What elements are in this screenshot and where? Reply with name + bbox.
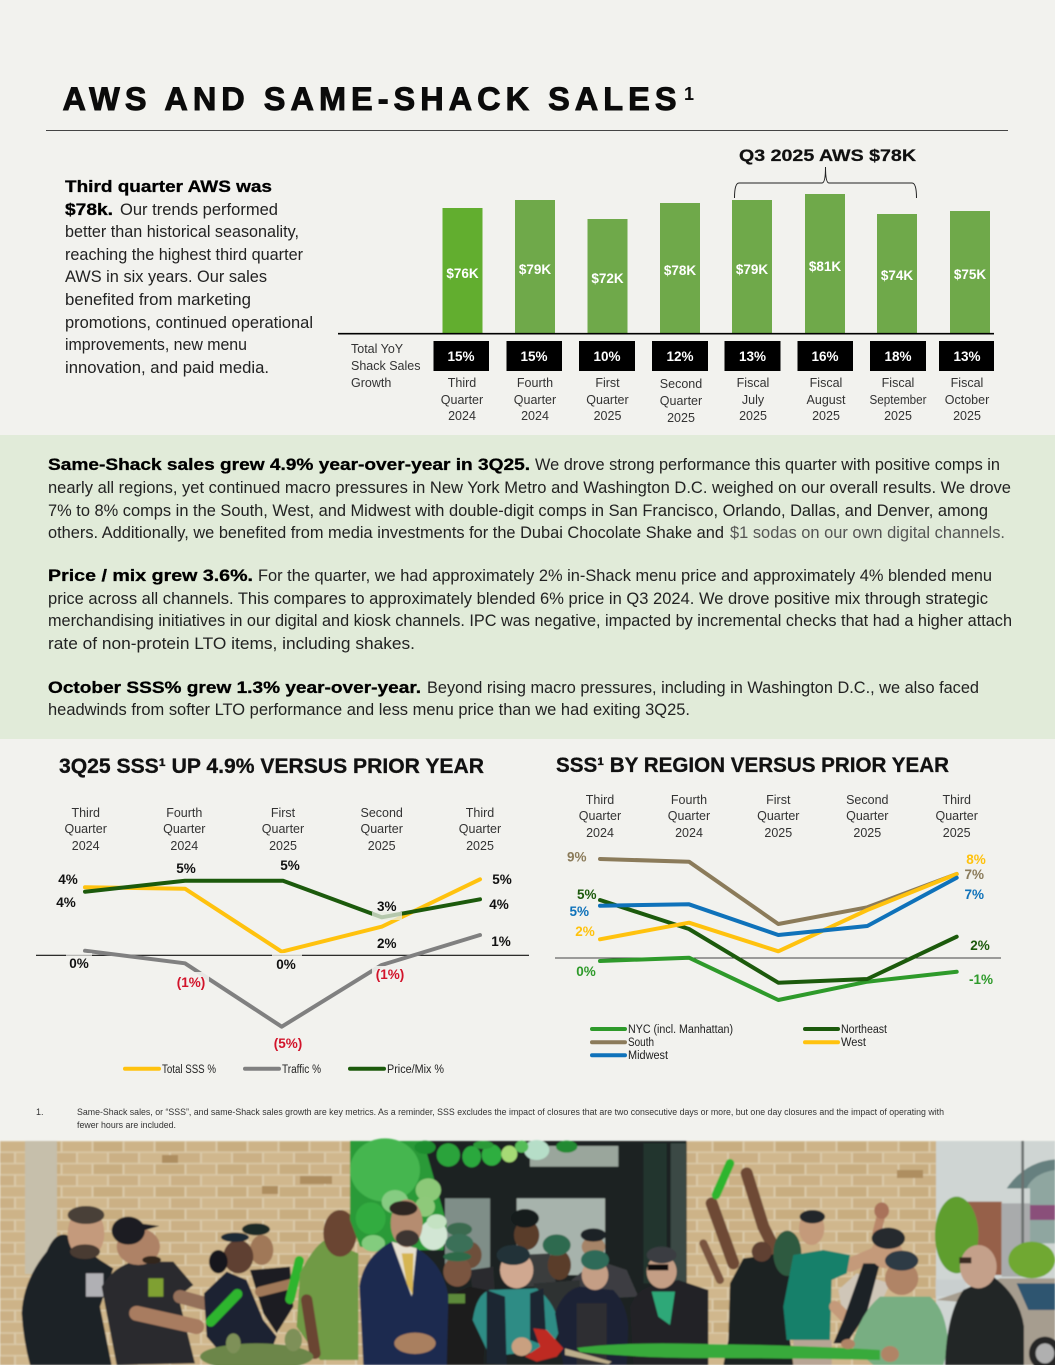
paragraph: price and mix: For the quarter, we had approximately 2% in-Shack menu price and approximately 4% blended menu [258, 567, 992, 585]
period labels: First [595, 376, 620, 390]
period labels: Fiscal [737, 376, 769, 390]
line chart: SSS by region: Quarter [757, 809, 799, 823]
period labels: Fourth [517, 376, 553, 390]
period labels: September [870, 393, 926, 407]
person: man in black tee with cap [102, 1217, 217, 1365]
brick wall and sky [0, 1141, 1055, 1365]
person: woman in navy [204, 1233, 277, 1360]
line chart: SSS by region [555, 793, 1001, 1062]
paragraph: same-shack sales: We drove strong performance this quarter with positive comps in [535, 456, 1000, 474]
period labels: 2025 [594, 409, 621, 423]
line chart: 3Q25 SSS: 2% [377, 936, 396, 951]
legend: regions: NYC (incl. Manhattan) [628, 1024, 733, 1036]
ribbon hands [841, 1339, 899, 1362]
line chart: 3Q25 SSS: Quarter [163, 822, 205, 836]
growth percentage boxes: 10% [593, 349, 621, 364]
line chart: SSS by region: 7% [965, 887, 984, 902]
line chart: SSS by region: 0% [576, 964, 596, 979]
line chart: 3Q25 SSS: Quarter [459, 822, 501, 836]
bracket: Q3 months [734, 167, 916, 198]
line chart: SSS by region: 9% [567, 850, 586, 864]
line chart: 3Q25 SSS: 4% [489, 897, 509, 912]
person: man in black hoodie [22, 1206, 113, 1365]
line chart: SSS by region: 2025 [943, 826, 971, 840]
line chart: SSS by region: Quarter [936, 809, 978, 823]
text block: AWS summary: better than historical seasonality, [65, 223, 299, 241]
scissors [512, 1328, 612, 1364]
paragraph: October SSS: October SSS% grew 1.3% year-over-year. [48, 678, 421, 697]
line chart: 3Q25 SSS: (5%) [274, 1036, 302, 1051]
line chart: 3Q25 SSS: Third [71, 806, 100, 820]
person: man in olive shirt [297, 1210, 358, 1360]
title: AWS AND SAME-SHACK SALES [62, 81, 676, 117]
left group of people [22, 1206, 358, 1365]
period labels: 2025 [884, 409, 912, 423]
line chart: 3Q25 SSS: Third [466, 806, 494, 820]
line chart: 3Q25 SSS: (1%) [177, 975, 205, 990]
period labels: Fiscal [882, 376, 914, 390]
line chart: 3Q25 SSS: 5% [280, 858, 300, 873]
growth percentage boxes: 16% [811, 349, 839, 364]
paragraph: same-shack sales: $1 sodas on our own digital channels. [730, 524, 1005, 542]
legend: SSS chart: Total SSS % [162, 1064, 216, 1076]
growth percentage boxes: 18% [884, 349, 912, 364]
text block: AWS summary: innovation, and paid media. [65, 359, 269, 377]
panel: same-shack commentary [0, 435, 1055, 739]
heading: region chart: SSS¹ BY REGION VERSUS PRIOR YEAR [556, 754, 949, 777]
line chart: SSS by region: 7% [965, 867, 984, 882]
line chart: SSS by region: Quarter [579, 809, 621, 823]
line chart: 3Q25 SSS: 4% [58, 872, 78, 887]
paragraph: price and mix: merchandising initiatives in our digital and kiosk channels. IPC was negative, impacted by incremental checks that had a higher attach [48, 612, 1012, 630]
line chart: 3Q25 SSS: Second [360, 806, 403, 820]
photo: ribbon cutting team [0, 1138, 1055, 1365]
period labels: Second [660, 377, 702, 391]
paragraph: October SSS [48, 678, 979, 719]
paragraph: October SSS: Beyond rising macro pressures, including in Washington D.C., we also faced [427, 679, 979, 697]
growth row label: Shack Sales [351, 359, 420, 373]
line chart: 3Q25 SSS: 5% [176, 861, 196, 876]
line chart: 3Q25 SSS: 2025 [466, 839, 494, 853]
period labels: Fiscal [951, 376, 983, 390]
line chart: 3Q25 SSS: Quarter [361, 822, 403, 836]
growth row label: Growth [351, 376, 391, 390]
bar chart: AWS: $74K [881, 268, 913, 283]
paragraph: price and mix: Price / mix grew 3.6%. [48, 566, 253, 585]
legend: SSS chart: Traffic % [282, 1064, 321, 1076]
text block: AWS summary: reaching the highest third quarter [65, 246, 303, 264]
line chart: SSS by region: 5% [570, 904, 589, 919]
paragraph: same-shack sales: others. Additionally, we benefited from media investments for the Dubai Chocolate Shake and [48, 524, 724, 542]
bar chart: AWS [338, 194, 994, 334]
line chart: SSS by region: 5% [577, 887, 596, 902]
growth percentage boxes [434, 341, 994, 371]
period labels: 2025 [953, 409, 981, 423]
legend: SSS chart [125, 1064, 444, 1076]
line chart: SSS by region: Second [846, 793, 889, 807]
footnote: fewer hours are included. [77, 1120, 176, 1130]
line chart: 3Q25 SSS: 2024 [72, 839, 100, 853]
bar chart: AWS: $81K [809, 259, 841, 274]
person: bald man in leather jacket [945, 1245, 1024, 1365]
line chart: SSS by region: Quarter [846, 809, 888, 823]
line chart: 3Q25 SSS: 1% [491, 934, 511, 949]
person: woman in quilted vest [630, 1247, 708, 1365]
footnote: Same-Shack sales, or “SSS”, and same-Shack sales growth are key metrics. As a reminder, SSS excludes the impact of closures that are two consecutive days or more, but one day closures and the impact of operating with [77, 1107, 944, 1117]
period labels: 2025 [812, 409, 840, 423]
period labels: 2024 [521, 409, 549, 423]
line chart: 3Q25 SSS: 4% [56, 895, 76, 910]
paragraph: price and mix: price across all channels. This compares to approximately blended 6% price in Q3 2024. We drove positive mix through strategic [48, 590, 988, 608]
person: man in teal polo [783, 1202, 889, 1365]
line chart: SSS by region: 2025 [853, 826, 881, 840]
text block: AWS summary: benefited from marketing [65, 291, 251, 309]
line chart: SSS by region: Third [586, 793, 614, 807]
person: woman in teal shirt [473, 1245, 560, 1365]
line chart: 3Q25 SSS: Quarter [262, 822, 304, 836]
line chart: SSS by region: 2025 [764, 826, 792, 840]
period labels [441, 376, 989, 425]
paragraph: price and mix [48, 566, 1012, 653]
bar chart: AWS: $79K [519, 262, 551, 277]
legend: regions: South [628, 1037, 654, 1049]
line chart: SSS by region: 2% [970, 938, 990, 953]
text block: AWS summary: $78k. [65, 200, 113, 219]
text block: AWS summary: AWS in six years. Our sales [65, 268, 267, 286]
line chart: SSS by region: 2024 [586, 826, 614, 840]
period labels: Quarter [441, 393, 483, 407]
bar chart: AWS: $76K [446, 266, 479, 281]
footnote [36, 1107, 944, 1130]
bar chart: AWS: $78K [664, 263, 696, 278]
text block: AWS summary: improvements, new menu [65, 336, 247, 354]
back row people [445, 1209, 638, 1313]
title: 1 [684, 84, 694, 104]
person: woman in light green shirt [852, 1251, 948, 1365]
line chart: 3Q25 SSS: First [271, 806, 296, 820]
bar chart: AWS: $79K [736, 262, 768, 277]
line chart: 3Q25 SSS: (1%) [376, 967, 404, 982]
text block: AWS summary: Our trends performed [120, 201, 278, 219]
growth percentage boxes: 15% [447, 349, 475, 364]
shrub [200, 1329, 313, 1365]
green ribbon [577, 1344, 880, 1360]
period labels: Third [448, 376, 476, 390]
street background [935, 1141, 1055, 1365]
line chart: 3Q25 SSS: 2024 [170, 839, 198, 853]
person: woman in navy jacket [555, 1250, 628, 1365]
right group and street scene [703, 1141, 1055, 1365]
person: man behind, dark tee [242, 1223, 293, 1333]
person: woman raising tubes [703, 1163, 801, 1365]
paragraph: same-shack sales [48, 455, 1011, 542]
period labels: 2025 [739, 409, 767, 423]
period labels: Quarter [514, 393, 556, 407]
growth percentage boxes: 12% [666, 349, 694, 364]
paragraph: October SSS: headwinds from softer LTO performance and less menu price than we had exiting 3Q25. [48, 701, 690, 719]
line chart: 3Q25 SSS: 0% [276, 957, 296, 972]
line chart: SSS by region: 2% [575, 924, 595, 939]
line chart: 3Q25 SSS [36, 806, 529, 1076]
door and windows [420, 1141, 687, 1365]
period labels: July [742, 393, 765, 407]
period labels: October [945, 393, 989, 407]
legend: regions: West [841, 1037, 867, 1049]
line chart: 3Q25 SSS: 2025 [368, 839, 396, 853]
line chart: 3Q25 SSS: 5% [492, 872, 512, 887]
growth percentage boxes: 13% [953, 349, 981, 364]
line chart: SSS by region: 8% [966, 852, 986, 867]
growth row label [351, 342, 420, 390]
line chart: SSS by region: First [766, 793, 791, 807]
paragraph: same-shack sales: 7% to 8% comps in the South, West, and Midwest with double-digit comps in San Francisco, Orlando, Dallas, and Denver, among [48, 502, 988, 520]
period labels: Quarter [586, 393, 629, 407]
paragraph: same-shack sales: Same-Shack sales grew 4.9% year-over-year in 3Q25. [48, 455, 530, 474]
person: man in navy suit [359, 1199, 448, 1365]
line chart: SSS by region: 2024 [675, 826, 703, 840]
bar chart: AWS: $75K [954, 267, 986, 282]
period labels: Fiscal [810, 376, 842, 390]
line chart: 3Q25 SSS: 2025 [269, 839, 297, 853]
heading: SSS chart: 3Q25 SSS¹ UP 4.9% VERSUS PRIOR YEAR [59, 755, 484, 778]
line chart: 3Q25 SSS: 0% [69, 956, 89, 971]
storefront and center group [350, 1138, 708, 1365]
period labels: August [807, 393, 846, 407]
legend: SSS chart: Price/Mix % [387, 1064, 444, 1076]
paragraph: price and mix: rate of non-protein LTO items, including shakes. [48, 635, 415, 653]
footnote: 1. [36, 1107, 44, 1117]
line chart: 3Q25 SSS: Fourth [166, 806, 202, 820]
balloons [350, 1138, 577, 1252]
text block: AWS summary [65, 177, 313, 377]
growth row label: Total YoY [351, 342, 404, 356]
heading: Q3 2025 AWS: Q3 2025 AWS $78K [739, 146, 917, 165]
bar chart: AWS: $72K [591, 271, 624, 286]
growth percentage boxes: 13% [739, 349, 766, 364]
line chart: 3Q25 SSS: Quarter [65, 822, 107, 836]
person: woman in black apron [443, 1252, 487, 1365]
text block: AWS summary: promotions, continued operational [65, 314, 313, 332]
line chart: SSS by region: Third [942, 793, 971, 807]
legend: regions: Northeast [841, 1024, 888, 1036]
growth percentage boxes: 15% [520, 349, 548, 364]
person: man in dark vest [833, 1228, 905, 1343]
line chart: SSS by region: Quarter [668, 809, 710, 823]
legend: regions [592, 1024, 888, 1062]
line chart: SSS by region: -1% [969, 972, 993, 987]
green party tubes [211, 1261, 299, 1322]
paragraph: same-shack sales: nearly all regions, yet continued macro pressures in New York Metro and Washington D.C. weighed on our overall results. We drove [48, 479, 1011, 497]
period labels: Quarter [660, 394, 702, 408]
line chart: 3Q25 SSS: 3% [377, 899, 396, 914]
period labels: 2025 [667, 411, 695, 425]
text block: AWS summary: Third quarter AWS was [65, 177, 272, 196]
line chart: SSS by region: Fourth [671, 793, 707, 807]
legend: regions: Midwest [628, 1050, 669, 1062]
period labels: 2024 [448, 409, 476, 423]
